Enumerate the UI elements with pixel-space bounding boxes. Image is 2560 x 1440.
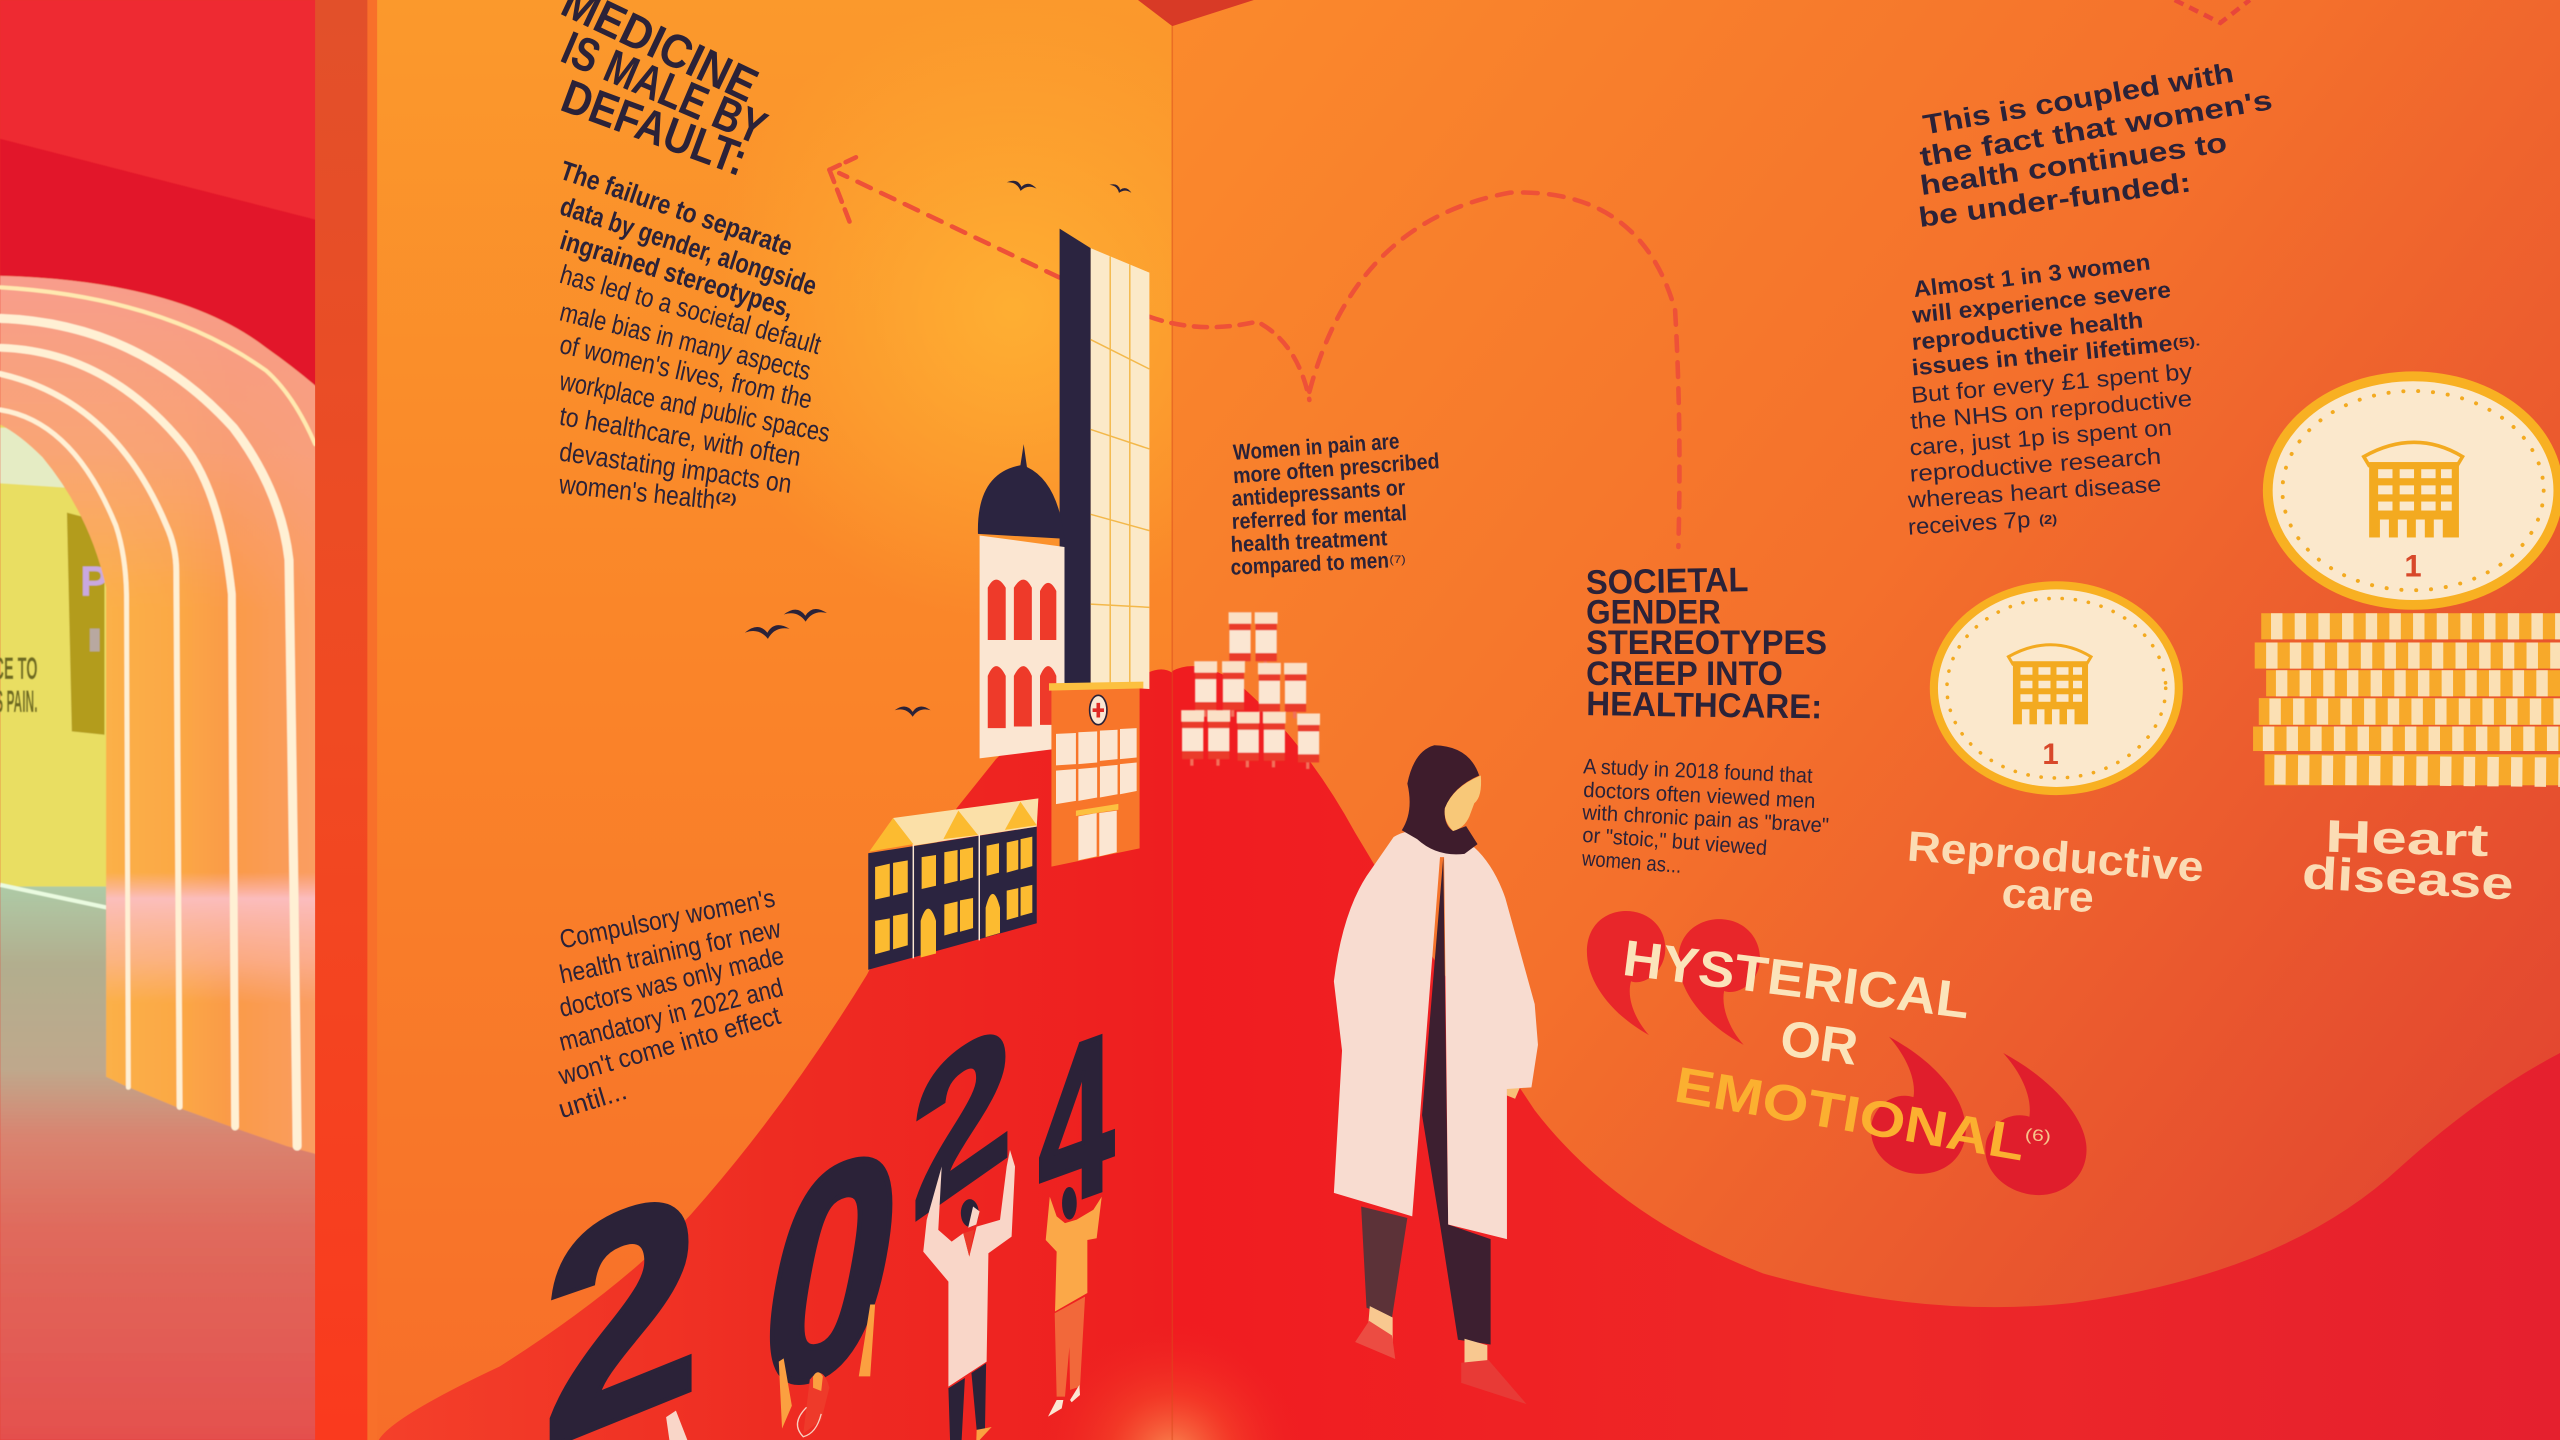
- text block: women in pain: Women in pain are: [1232, 428, 1400, 465]
- text block: women in pain: health treatment: [1230, 525, 1388, 557]
- text block: compulsory women's health training: mandatory in 2022 and: [556, 972, 786, 1057]
- icon: closing quote marks: [1871, 1037, 2087, 1195]
- text block: failure to separate data: of women's lives, from the: [557, 329, 815, 415]
- illustration: person under the 0: [779, 1304, 875, 1437]
- hands: [1353, 1048, 1520, 1099]
- heading: medicine is male by default: DEFAULT:: [555, 70, 754, 187]
- label: heart disease: disease: [2301, 847, 2515, 910]
- label: heart disease: Heart: [2325, 811, 2489, 866]
- number: 2024: 4: [1038, 983, 1114, 1260]
- heading: medicine is male by default: [554, 0, 774, 187]
- text block: under-funded heading: This is coupled with: [1921, 57, 2236, 140]
- text block: women in pain: antidepressants or: [1231, 475, 1406, 511]
- illustration: domed church: [978, 444, 1064, 758]
- text block: reproductive funding facts: [1906, 248, 2201, 540]
- text block: failure to separate data: The failure to separate: [556, 155, 796, 262]
- illustration: person under the first 2: [666, 1411, 687, 1440]
- text block: study in 2018: or "stoic," but viewed: [1582, 824, 1768, 860]
- text block: women in pain: compared to men: [1230, 548, 1389, 580]
- illustration: navy school building: [868, 798, 1038, 970]
- callout: hysterical or emotional: (6): [2024, 1126, 2052, 1146]
- icon: reproductive care coin: [1930, 581, 2183, 795]
- heading: medicine is male by default: IS MALE BY: [554, 22, 774, 155]
- illustration: person holding the second 2: [923, 1150, 1015, 1440]
- text block: reproductive funding facts: receives 7p: [1907, 506, 2031, 540]
- icon: birds: [744, 179, 1132, 717]
- panel: right wall background: [1172, 0, 2560, 1440]
- text block: failure to separate data: devastating impacts on: [558, 437, 794, 499]
- text block: reproductive funding facts: the NHS on reproductive: [1909, 385, 2193, 434]
- text block: failure to separate data: ingrained stereotypes,: [557, 225, 797, 324]
- illustration: person holding the 4: [1046, 1187, 1102, 1417]
- text block: compulsory women's health training: won't come into effect: [554, 1000, 784, 1091]
- face: [1445, 776, 1481, 831]
- corner glow: [1033, 1306, 1311, 1440]
- view through arch: [0, 416, 114, 908]
- text block: women in pain: (7): [1389, 554, 1406, 566]
- number: 2024: [542, 972, 1114, 1440]
- callout: hysterical or emotional: HYSTERICAL: [1620, 929, 1973, 1029]
- text block: compulsory women's health training: [554, 883, 787, 1124]
- text block: women in pain: more often prescribed: [1232, 448, 1440, 488]
- text block: reproductive funding facts: But for every £1 spent by: [1910, 358, 2194, 408]
- arch ribs: [0, 276, 317, 1154]
- left trouser leg: [1361, 1207, 1407, 1318]
- text block: reproductive funding facts: whereas heart disease: [1906, 470, 2162, 513]
- panel: wall end: [315, 0, 379, 1440]
- callout: hysterical or emotional: EMOTIONAL: [1671, 1056, 2030, 1172]
- hijab: [1402, 745, 1479, 854]
- text block: reproductive funding facts: reproductive health: [1910, 306, 2144, 355]
- label: reproductive care: [1906, 823, 2205, 921]
- callout: hysterical or emotional: OR: [1777, 1009, 1861, 1076]
- text block: failure to separate data: [556, 155, 832, 515]
- text block: failure to separate data: male bias in many aspects: [557, 297, 814, 386]
- label: reproductive care: Reproductive: [1906, 823, 2205, 891]
- text block: failure to separate data: workplace and public spaces: [556, 366, 832, 448]
- text block: failure to separate data: data by gender, alongside: [557, 191, 820, 301]
- text block: reproductive funding facts: (2): [2039, 512, 2057, 527]
- text block: under-funded heading: [1917, 57, 2274, 233]
- text block: failure to separate data: has led to a societal default: [557, 259, 825, 360]
- heading: societal gender stereotypes: SOCIETAL: [1586, 561, 1749, 602]
- text block: study in 2018: with chronic pain as "brave": [1581, 801, 1830, 838]
- illustration: hospital: [1049, 682, 1143, 867]
- text block: compulsory women's health training: Compulsory women's: [557, 883, 777, 954]
- text block: compulsory women's health training: until...: [555, 1075, 630, 1124]
- text block: study in 2018: [1580, 755, 1830, 878]
- text block: under-funded heading: the fact that women's: [1918, 84, 2274, 172]
- text block: women in pain: [1230, 428, 1440, 580]
- text block: reproductive funding facts: Almost 1 in 3 women: [1912, 248, 2152, 302]
- panel: left wall background: [377, 0, 1322, 1440]
- text block: reproductive funding facts: (5).: [2172, 333, 2201, 351]
- illustration: stacked pill bottles: [1181, 612, 1320, 769]
- text block: under-funded heading: health continues to: [1918, 127, 2229, 201]
- text block: failure to separate data: (2): [715, 489, 737, 506]
- arrow: dashed path across corner and over arch: [1149, 192, 1679, 547]
- text block: failure to separate data: women's health: [557, 469, 717, 515]
- illustration: woman in white coat: [1334, 745, 1538, 1404]
- arrow: dashed head at top right: [2175, 0, 2250, 23]
- arrow: dashed path to top left: [829, 157, 1060, 278]
- callout: hysterical or emotional: [1620, 929, 2052, 1172]
- text block: under-funded heading: be under-funded:: [1917, 166, 2193, 233]
- heading: societal gender stereotypes: CREEP INTO: [1586, 655, 1783, 693]
- heading: societal gender stereotypes: HEALTHCARE:: [1586, 685, 1822, 726]
- text block: failure to separate data: to healthcare, with often: [557, 401, 803, 472]
- text block: reproductive funding facts: issues in their lifetime: [1911, 330, 2174, 380]
- illustration: tower: [1060, 229, 1149, 689]
- view through arch: P: [80, 558, 108, 605]
- icon: opening quote marks: [1587, 911, 1760, 1045]
- text block: study in 2018: women as...: [1580, 847, 1682, 878]
- text block: compulsory women's health training: health training for new: [557, 913, 783, 989]
- left wall red hill: [379, 669, 1172, 1440]
- text block: reproductive funding facts: care, just 1p is spent on: [1909, 414, 2173, 460]
- text block: compulsory women's health training: doctors was only made: [556, 940, 787, 1023]
- label: heart disease: [2301, 811, 2515, 910]
- label: reproductive care: care: [2000, 869, 2095, 921]
- ankles and shoes: [1355, 1306, 1527, 1404]
- wall corner seam: [1138, 0, 1254, 1440]
- text block: women in pain: referred for mental: [1231, 500, 1408, 534]
- text block: reproductive funding facts: reproductive research: [1909, 443, 2162, 487]
- text block: study in 2018: A study in 2018 found that: [1583, 755, 1813, 788]
- right trouser leg: [1422, 857, 1491, 1344]
- right wall red hill: [1172, 666, 2560, 1440]
- icon: reproductive care coin: 1: [2042, 738, 2059, 771]
- coat: [1334, 831, 1538, 1239]
- icon: heart disease coin: [2263, 371, 2560, 610]
- heading: societal gender stereotypes: STEREOTYPES: [1586, 624, 1827, 662]
- number: 2024: 2: [911, 972, 1013, 1265]
- panel: corridor and arch: [0, 0, 318, 1440]
- icon: stack of coins: [2253, 613, 2560, 785]
- text block: reproductive funding facts: will experience severe: [1910, 276, 2172, 328]
- heading: societal gender stereotypes: [1586, 561, 1827, 726]
- icon: heart disease coin: 1: [2404, 548, 2422, 583]
- text block: study in 2018: doctors often viewed men: [1583, 779, 1816, 813]
- heading: societal gender stereotypes: GENDER: [1586, 593, 1721, 631]
